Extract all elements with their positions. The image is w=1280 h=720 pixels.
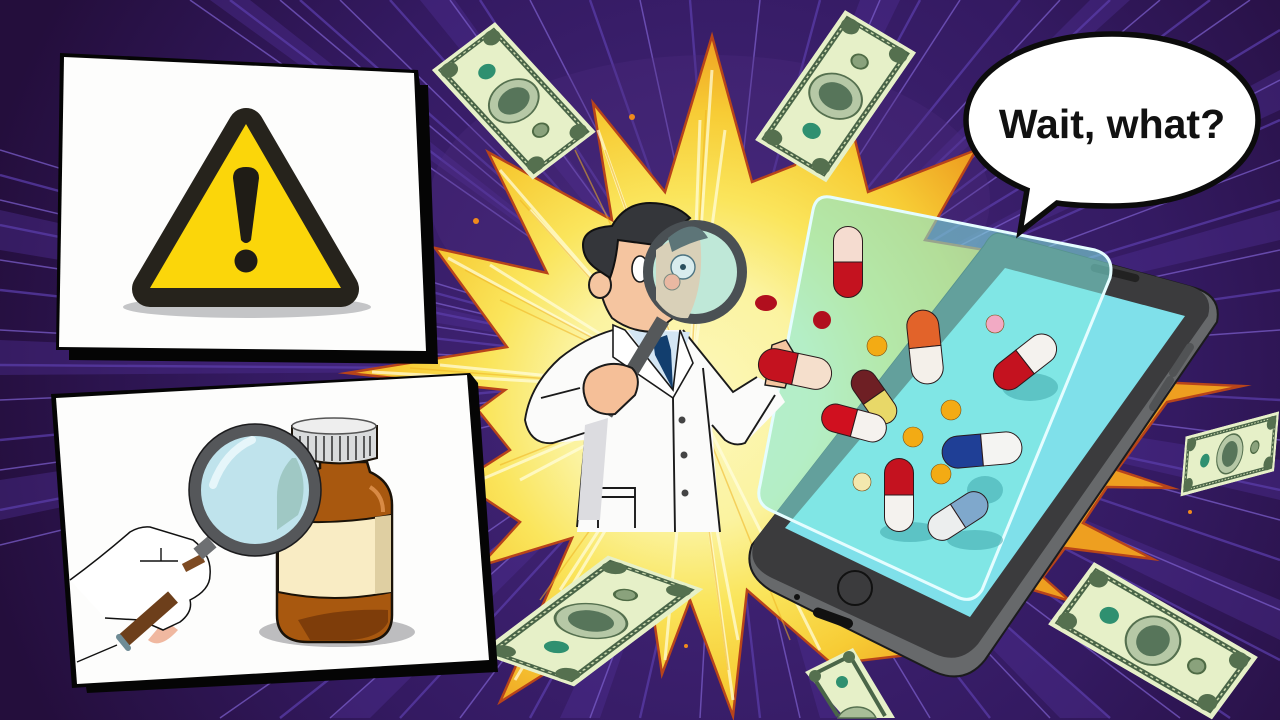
money: top right bill	[755, 10, 916, 182]
speaker	[1090, 263, 1140, 283]
lab coat	[525, 330, 785, 532]
home button	[838, 571, 872, 605]
bottle shadow	[259, 617, 415, 647]
phone with hologram	[749, 197, 1218, 676]
scientist	[525, 203, 795, 532]
capsule: white red	[987, 328, 1063, 396]
hologram glass	[759, 197, 1111, 599]
magnifier lens	[648, 225, 742, 319]
capsule shadows	[880, 373, 1058, 550]
other hand	[765, 340, 795, 388]
panel: bottle inspection	[51, 373, 498, 693]
money: bottom right bill	[1048, 562, 1258, 719]
small tablets	[853, 315, 1004, 491]
hair	[583, 203, 690, 278]
capsule: top red white	[834, 226, 862, 298]
speech bubble	[966, 34, 1258, 232]
head	[600, 230, 690, 332]
capsules	[755, 226, 1063, 546]
magnifying glass	[189, 424, 321, 556]
money: top left bill	[432, 22, 596, 180]
capsule: held red cream	[755, 346, 835, 392]
pill bottle	[277, 418, 392, 642]
warning triangle shadow	[123, 296, 371, 318]
capsule: red white small	[819, 401, 889, 445]
coat shading	[578, 418, 608, 520]
mic	[794, 594, 800, 600]
hand holding magnifier	[70, 527, 212, 662]
coat outline	[525, 330, 775, 532]
phone screen	[785, 268, 1185, 617]
eye	[632, 256, 648, 282]
phone face	[752, 234, 1209, 658]
phone body	[749, 234, 1218, 676]
warning triangle icon	[150, 124, 341, 289]
money: bottom centre bill	[805, 648, 895, 718]
capsule: red white vertical	[884, 458, 914, 532]
charge port	[812, 606, 854, 630]
magnifier handle	[606, 320, 663, 414]
capsule: orange white	[905, 309, 945, 385]
hand gripping handle	[583, 364, 638, 414]
sparks	[473, 114, 1192, 648]
bubble text: Wait, what?	[999, 101, 1225, 147]
ear	[589, 272, 611, 298]
capsule: blue white	[923, 486, 993, 546]
collar lapels	[613, 325, 693, 398]
buttons	[678, 416, 688, 496]
floating red pills	[755, 295, 831, 329]
panel: warning sign	[56, 53, 438, 364]
side buttons	[1153, 347, 1190, 407]
shirt and tie	[628, 330, 690, 395]
money: right bill	[1180, 411, 1279, 496]
money: bottom left bill	[478, 555, 703, 687]
capsule: maroon yellow	[846, 365, 902, 429]
capsule: navy white	[941, 431, 1023, 469]
explosion starburst	[347, 36, 1242, 716]
